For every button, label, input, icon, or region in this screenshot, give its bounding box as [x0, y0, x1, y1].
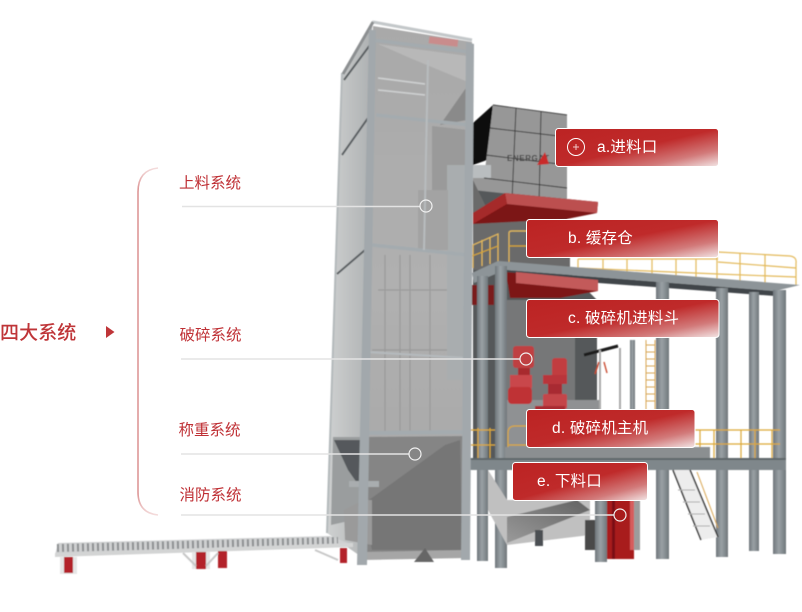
callout d: crusher main unit	[526, 410, 695, 448]
leader line: lifting	[182, 200, 432, 212]
discharge chute	[488, 470, 595, 550]
callout e: discharge port: e. 下料口	[537, 472, 602, 490]
callout a: feed inlet: a.进料口	[597, 138, 657, 156]
system label: crushing: 破碎系统	[180, 326, 242, 344]
access stairs	[673, 470, 718, 540]
upper platform railing	[472, 231, 796, 285]
arrow	[106, 326, 114, 338]
overhead pipe and hook	[584, 346, 620, 460]
callout b: buffer bin: b. 缓存仓	[568, 229, 633, 247]
steel columns	[477, 266, 786, 568]
system label: weighing: 称重系统	[178, 421, 241, 439]
lower platform deck	[470, 447, 786, 470]
hopper: feed inlet: ENERGAT	[507, 154, 549, 163]
leader line: fire protection	[181, 509, 626, 521]
callout a: feed inlet	[556, 128, 718, 166]
callout e: discharge port	[512, 462, 648, 500]
red buffer tray	[473, 193, 598, 224]
heading: four systems: 四大系统	[0, 322, 76, 344]
callout b: buffer bin	[526, 220, 718, 258]
red feed hopper frame	[472, 272, 598, 305]
callout c: crusher feed hopper	[526, 300, 719, 338]
callout c: crusher feed hopper: c. 破碎机进料斗	[568, 309, 679, 327]
tower: lifting system	[327, 20, 474, 565]
system label: fire protection: 消防系统	[180, 486, 242, 504]
bracket	[138, 168, 158, 515]
roller conveyor	[55, 536, 353, 574]
leader line: crushing	[181, 353, 532, 365]
machine body	[473, 180, 600, 460]
callout d: crusher main unit: d. 破碎机主机	[552, 419, 649, 437]
system label: lifting: 上料系统	[179, 174, 241, 192]
leader line: weighing	[181, 448, 421, 460]
lower platform railing	[471, 426, 780, 458]
upper platform deck	[472, 261, 800, 296]
red motors	[508, 346, 567, 414]
hopper: feed inlet	[473, 105, 567, 218]
access ladder	[646, 340, 655, 410]
fire suppression cylinder	[607, 492, 640, 559]
